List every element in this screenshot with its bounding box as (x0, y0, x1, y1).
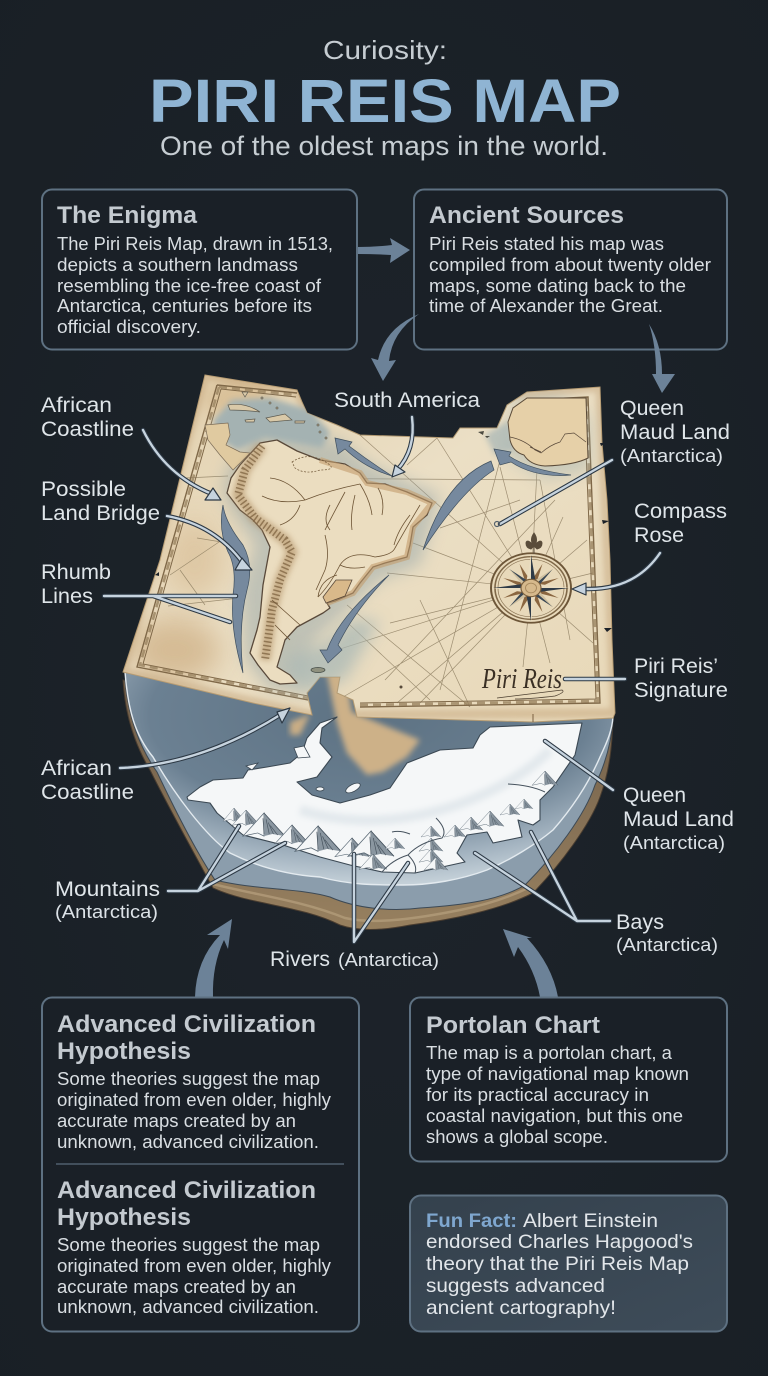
text: Portolan Chart body: coastal navigation, but this one (426, 1105, 683, 1126)
leader: Compass Rose (572, 553, 660, 595)
text: hypothesis two body: originated from even older, highly (57, 1255, 332, 1276)
text: Portolan Chart body (426, 1042, 689, 1147)
label: Rivers (270, 947, 439, 971)
heading: hypothesis one: Hypothesis (57, 1038, 191, 1065)
leader: South America (392, 417, 413, 477)
leader: Rivers (354, 854, 408, 942)
text: Fun Fact: suggests advanced (426, 1275, 605, 1297)
map parchment (123, 375, 615, 722)
leader: Rhumb Lines (104, 596, 236, 622)
neatline border (137, 385, 600, 707)
central america land (205, 423, 250, 470)
text: The Enigma body: official discovery. (57, 316, 201, 337)
heading: hypothesis two: Hypothesis (57, 1204, 191, 1231)
label: African Coastline: Coastline (41, 417, 134, 441)
text: hypothesis one body: unknown, advanced civilization. (57, 1131, 319, 1152)
arrow: to Caribbean (335, 438, 392, 476)
leader: Mountains (168, 826, 285, 891)
text: Ancient Sources body: time of Alexander the Great. (429, 295, 663, 316)
heading: hypothesis two: Advanced Civilization (57, 1177, 316, 1204)
label: Mountains: Mountains (55, 877, 160, 901)
text: The Enigma body: resembling the ice-free coast of (57, 275, 322, 296)
ice band (125, 680, 613, 910)
text: Portolan Chart body: for its practical accuracy in (426, 1084, 649, 1105)
text: Ancient Sources body (429, 233, 711, 316)
compass rose (491, 533, 571, 623)
label: Queen Maud Land upper: Queen (620, 396, 684, 420)
arrow: Advanced Civilization to map (195, 919, 232, 997)
inner sea (125, 660, 613, 885)
label: African Coastline lower: Coastline (41, 780, 134, 804)
text: Ancient Sources body: maps, some dating back to the (429, 275, 686, 296)
rhumb lines (168, 435, 593, 707)
text: hypothesis two body: accurate maps created by an (57, 1276, 296, 1297)
heading: hypothesis one (57, 1011, 316, 1065)
heading: hypothesis one: Advanced Civilization (57, 1011, 316, 1038)
rivers on ice (382, 784, 545, 873)
label: Queen Maud Land upper (620, 396, 730, 466)
label: Rhumb Lines: Lines (41, 584, 93, 608)
leader: Queen Maud Land lower (545, 741, 613, 790)
label: Queen Maud Land lower: Queen (623, 783, 686, 807)
text: hypothesis two body: unknown, advanced civilization. (57, 1296, 319, 1317)
main title: PIRI REIS MAP (149, 67, 621, 135)
paper staining (130, 618, 220, 682)
label: Bays: Bays (616, 910, 664, 934)
text: Fun Fact: theory that the Piri Reis Map (426, 1253, 689, 1275)
text: The Enigma body: Antarctica, centuries before its (57, 295, 312, 316)
label: Piri Reis' Signature: Signature (634, 678, 728, 702)
heading: The Enigma: The Enigma (57, 202, 197, 229)
panel: The Enigma (42, 190, 357, 350)
arrow: Ancient Sources to Queen Maud Land (649, 324, 675, 393)
arrow: Enigma to Ancient Sources (358, 238, 410, 263)
label: Compass Rose: Rose (634, 523, 684, 547)
text: hypothesis one body: Some theories suggest the map (57, 1068, 320, 1089)
panel: Advanced Civilization Hypothesis (42, 998, 359, 1332)
arrow: Ancient Sources to map left (371, 314, 419, 381)
heading: hypothesis two (57, 1177, 316, 1231)
text: hypothesis one body: originated from even older, highly (57, 1089, 332, 1110)
leader: Bays (475, 832, 610, 921)
label: Bays (616, 910, 718, 955)
map blue arrows (221, 438, 571, 673)
text: The Enigma body: depicts a southern landmass (57, 254, 298, 275)
heading: Portolan Chart: Portolan Chart (426, 1012, 600, 1039)
label: Piri Reis' Signature: Piri Reis’ (634, 654, 718, 678)
text: Fun Fact: Albert Einstein (523, 1210, 658, 1232)
signature: Piri Reis (481, 663, 562, 695)
label: Compass Rose: Compass (634, 499, 727, 523)
label: African Coastline lower: African (41, 756, 112, 780)
text: The Enigma body: The Piri Reis Map, drawn in 1513, (57, 233, 333, 254)
arrow: ocean crossing (423, 461, 494, 550)
label: African Coastline: African (41, 393, 112, 417)
leader: African Coastline (143, 430, 221, 500)
text: Portolan Chart body: shows a global scope. (426, 1126, 608, 1147)
label: African Coastline lower (41, 756, 134, 804)
text: hypothesis one body: accurate maps created by an (57, 1110, 296, 1131)
leader: Possible Land Bridge (167, 516, 252, 570)
arrow: Portolan Chart to map (503, 929, 558, 997)
panel: Fun Fact (410, 1196, 727, 1332)
torn edge nicks (155, 443, 612, 632)
caribbean islands (228, 392, 327, 439)
text: hypothesis two body: Some theories suggest the map (57, 1234, 320, 1255)
label: Rhumb Lines (41, 560, 111, 608)
label: Possible Land Bridge: Possible (41, 477, 126, 501)
bottom stitch border marks (532, 714, 534, 722)
label: South America: South America (334, 388, 480, 412)
label: Rivers: (Antarctica) (338, 950, 439, 970)
andes (238, 446, 292, 660)
arrow: toward Antarctica (320, 575, 389, 663)
label: Piri Reis' Signature (634, 654, 728, 702)
text: Portolan Chart body: type of navigational map known (426, 1063, 689, 1084)
text: Fun Fact: endorsed Charles Hapgood's (426, 1231, 693, 1253)
text: Ancient Sources body: compiled from about twenty older (429, 254, 711, 275)
leader: Queen Maud Land upper (494, 460, 612, 526)
falkland islands (311, 668, 325, 672)
rivers of south america (262, 478, 420, 640)
label: Rhumb Lines: Rhumb (41, 560, 111, 584)
label: Compass Rose (634, 499, 727, 547)
text: Ancient Sources body: Piri Reis stated his map was (429, 233, 664, 254)
text: Fun Fact: Fun Fact: (426, 1210, 517, 1232)
label: Queen Maud Land lower (623, 783, 734, 853)
heading: Ancient Sources: Ancient Sources (429, 202, 624, 229)
text: The Enigma body (57, 233, 333, 337)
antarctic disc (123, 660, 613, 930)
rock edge (123, 680, 613, 930)
label: Queen Maud Land lower: (Antarctica) (623, 833, 725, 853)
exposed tan seabed (326, 670, 420, 775)
panel: Portolan Chart (410, 998, 727, 1162)
label: Queen Maud Land upper: (Antarctica) (620, 446, 723, 466)
leader: Signature (565, 677, 625, 681)
callout leaders (104, 417, 660, 942)
arrow: from Africa (494, 449, 571, 475)
text: hypothesis one body (57, 1068, 332, 1152)
sea wash around coasts (222, 432, 440, 690)
subtitle: One of the oldest maps in the world. (160, 131, 608, 161)
eyebrow: Curiosity: Curiosity: (323, 35, 447, 65)
label: Queen Maud Land lower: Maud Land (623, 807, 734, 831)
label: Possible Land Bridge (41, 477, 160, 525)
arrow: west coast current (221, 505, 250, 673)
panel: Ancient Sources (414, 190, 727, 350)
mountains (223, 771, 558, 870)
label: Bays: (Antarctica) (616, 935, 718, 955)
label: Mountains (55, 877, 160, 922)
africa fragment (508, 398, 588, 466)
label: Possible Land Bridge: Land Bridge (41, 501, 160, 525)
label: African Coastline (41, 393, 134, 441)
ice continent (187, 717, 582, 873)
text: Portolan Chart body: The map is a portolan chart, a (426, 1042, 673, 1063)
label: Rivers: Rivers (270, 947, 330, 971)
ice islands (246, 746, 362, 795)
text: Fun Fact (426, 1210, 693, 1319)
label: Mountains: (Antarctica) (55, 902, 158, 922)
leader: African Coastline lower (120, 708, 290, 768)
south america (227, 440, 432, 684)
label: Queen Maud Land upper: Maud Land (620, 420, 730, 444)
text: Fun Fact: ancient cartography! (426, 1297, 616, 1319)
title block (149, 35, 621, 161)
text: hypothesis two body (57, 1234, 332, 1317)
